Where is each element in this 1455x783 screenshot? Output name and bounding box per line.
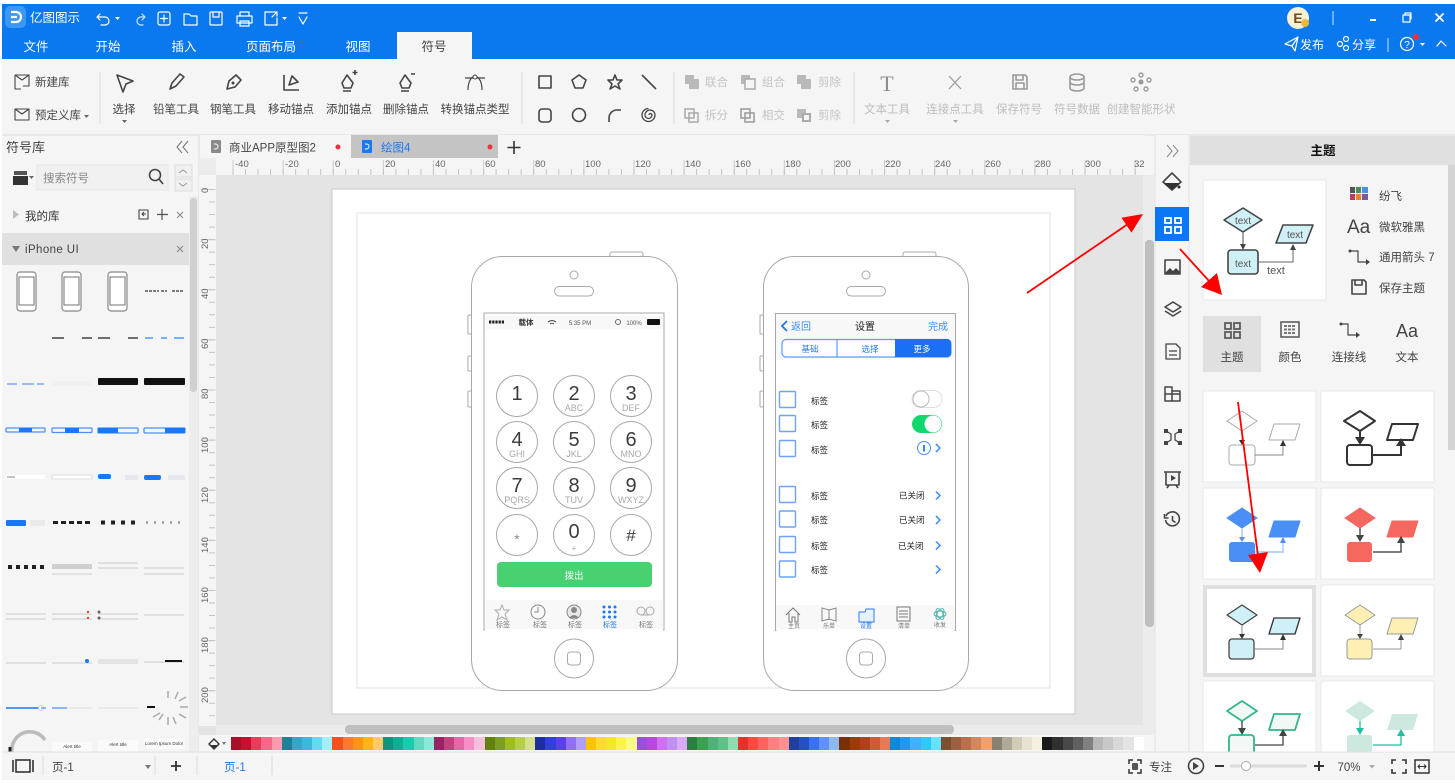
quick access icons — [97, 12, 307, 26]
symbol library panel — [2, 135, 199, 752]
icon: image — [1165, 260, 1180, 274]
horizontal ruler: 80 — [535, 159, 546, 170]
navigation bar: 设置 — [855, 321, 875, 333]
expand icon — [1167, 145, 1178, 157]
theme tabs: 文本 — [1396, 350, 1419, 364]
navigation bar — [776, 314, 955, 337]
horizontal ruler: 160 — [735, 159, 751, 170]
keypad: MNO — [620, 449, 642, 459]
boolean tools disabled — [685, 75, 841, 122]
icon: fill bucket — [1163, 173, 1181, 190]
page view icon — [13, 760, 33, 772]
vertical ruler: 60 — [200, 338, 211, 349]
panel heading: 符号库 — [6, 140, 45, 155]
add page — [171, 761, 181, 771]
horizontal ruler: 200 — [835, 159, 851, 170]
text and data tools disabled: 连接点工具 — [926, 102, 984, 116]
card: mint — [1321, 681, 1434, 772]
keypad: 2 — [568, 383, 580, 405]
library scrollbar — [189, 196, 198, 752]
theme tabs: Aa — [1396, 321, 1419, 341]
status bar: 100% — [626, 321, 642, 327]
search box: 搜索符号 — [43, 171, 89, 185]
settings rows — [780, 390, 942, 577]
horizontal ruler: 140 — [685, 159, 701, 170]
settings rows: 已关闭 — [899, 515, 925, 525]
red arrow: to selected card — [1238, 402, 1268, 573]
settings rows: 已关闭 — [898, 541, 924, 551]
icon: mind map — [1164, 429, 1182, 445]
palette bucket icon — [199, 735, 1145, 752]
menu tabs: 开始 — [95, 40, 121, 54]
text and data tools disabled: 文本工具 — [864, 102, 910, 116]
keypad: 0 — [568, 521, 580, 543]
keypad: WXYZ — [618, 495, 645, 505]
horizontal ruler: 0 — [335, 159, 340, 170]
page selector — [52, 762, 151, 774]
anchor tools: 添加锚点 — [326, 102, 372, 116]
settings tab bar: 乐单 — [823, 622, 835, 630]
horizontal ruler: 240 — [935, 159, 951, 170]
menu tabs: 文件 — [23, 39, 49, 54]
vertical ruler: 180 — [200, 637, 211, 653]
keypad: DEF — [622, 403, 641, 413]
horizontal ruler: -20 — [285, 159, 299, 170]
segmented control: 基础 — [801, 344, 819, 354]
keypad: 5 — [568, 429, 580, 451]
horizontal ruler: 32 — [1134, 159, 1145, 170]
canvas area — [199, 158, 1155, 752]
text and data tools disabled: 符号数据 — [1054, 102, 1100, 116]
app name: 亿图图示 — [30, 10, 80, 25]
symbol thumbnails: Alert title — [63, 744, 81, 749]
dial button — [497, 562, 652, 587]
keypad: 4 — [511, 429, 523, 451]
vertical ruler: 100 — [200, 437, 211, 453]
boolean tools disabled: 拆分 — [705, 108, 728, 122]
keypad: PQRS — [504, 495, 530, 505]
vertical ruler: 120 — [200, 487, 211, 503]
tab: drawing 4: 绘图4 — [381, 140, 411, 154]
vertical ruler: 0 — [200, 188, 211, 193]
horizontal ruler: 20 — [385, 159, 396, 170]
vertical scrollbar — [1143, 175, 1155, 735]
zoom slider — [1215, 761, 1375, 774]
horizontal ruler — [199, 158, 1145, 175]
menu tabs: 视图 — [345, 39, 371, 54]
dial tab bar: 标签 — [603, 620, 617, 629]
theme options list — [1347, 187, 1435, 295]
phone 1: dial pad — [468, 252, 678, 690]
menu tabs: 页面布局 — [246, 40, 296, 54]
horizontal ruler: 120 — [635, 159, 651, 170]
horizontal ruler: 220 — [885, 159, 901, 170]
theme options list: Aa — [1347, 217, 1371, 238]
active page label: 页-1 — [224, 762, 246, 774]
horizontal ruler: -40 — [235, 159, 249, 170]
horizontal ruler: 40 — [435, 159, 446, 170]
icon: presentation — [1164, 472, 1181, 488]
segmented control — [776, 337, 955, 359]
icon: palette — [1350, 187, 1368, 200]
ribbon toolbar — [2, 70, 1455, 135]
text and data tools disabled: 创建智能形状 — [1106, 102, 1176, 116]
keypad: 3 — [625, 383, 637, 405]
vertical ruler — [199, 175, 216, 726]
segmented control: 更多 — [913, 344, 931, 354]
title bar — [2, 4, 1455, 59]
keypad: # — [626, 526, 636, 545]
horizontal ruler: 260 — [985, 159, 1001, 170]
symbol thumbnails: Alert title — [109, 742, 127, 747]
toggle off — [912, 390, 942, 408]
theme tabs: 主题 — [1220, 351, 1244, 364]
keypad: TUV — [565, 495, 583, 505]
right theme panel — [1190, 136, 1455, 772]
theme cards — [1203, 391, 1434, 772]
navigation bar: 返回 — [791, 321, 811, 333]
icon: layers — [1165, 302, 1181, 316]
vertical ruler: 160 — [200, 587, 211, 603]
zoom slider: 70% — [1337, 762, 1361, 774]
my library row: 我的库 — [25, 209, 60, 223]
horizontal ruler: 280 — [1035, 159, 1051, 170]
icon: theme selected — [1155, 207, 1189, 241]
home button — [554, 639, 594, 678]
anchor tools: 钢笔工具 — [210, 102, 256, 116]
search box — [13, 165, 192, 191]
horizontal ruler: 300 — [1085, 159, 1101, 170]
red arrow: to preview — [1180, 249, 1222, 295]
settings rows: 已关闭 — [899, 490, 925, 500]
keypad: 7 — [511, 475, 523, 497]
iPhone UI row: iPhone UI — [25, 244, 79, 256]
dial tab bar — [485, 600, 663, 629]
boolean tools disabled: 相交 — [762, 108, 785, 122]
status bar — [485, 316, 663, 329]
vertical ruler: 140 — [200, 537, 211, 553]
theme options list: 保存主题 — [1379, 281, 1425, 295]
user and window controls: 分享 — [1352, 37, 1376, 52]
library buttons: 预定义库 — [35, 108, 81, 122]
card: green outline — [1203, 681, 1316, 772]
settings tab bar: 设置 — [860, 622, 872, 630]
user and window controls: E — [1293, 10, 1303, 26]
boolean tools disabled: 剪除 — [818, 75, 841, 89]
theme preview: text — [1235, 259, 1251, 270]
menu tabs — [23, 32, 472, 59]
vertical ruler: 80 — [200, 388, 211, 399]
shape tools — [539, 75, 656, 122]
library buttons: 新建库 — [35, 75, 70, 89]
card: red — [1321, 488, 1434, 579]
horizontal ruler: 60 — [485, 159, 496, 170]
vertical ruler: 40 — [200, 288, 211, 299]
theme options list: 微软雅黑 — [1379, 220, 1425, 234]
user and window controls — [1285, 7, 1446, 52]
settings tab bar: 收发 — [934, 621, 946, 629]
boolean tools disabled: 剪除 — [818, 108, 841, 122]
my library row — [13, 209, 183, 223]
keypad: 8 — [568, 475, 580, 497]
symbol thumbnails — [6, 272, 188, 752]
panel scrollbar — [1448, 165, 1455, 450]
settings tab bar — [776, 605, 955, 630]
settings rows: 标签 — [811, 396, 829, 406]
icon: outline — [1166, 344, 1180, 359]
panel heading: 主题 — [1310, 143, 1336, 158]
settings tab bar: 主页 — [788, 622, 800, 630]
card: outline — [1203, 391, 1316, 482]
icon: table — [1165, 387, 1180, 401]
user and window controls: 发布 — [1300, 37, 1324, 52]
card: light blue selected — [1205, 587, 1314, 675]
theme tabs: 连接线 — [1332, 350, 1367, 364]
theme tabs — [1203, 316, 1419, 372]
toggle on — [912, 415, 942, 433]
iPhone UI row — [2, 233, 189, 265]
horizontal ruler: 100 — [585, 159, 601, 170]
text and data tools disabled: T — [880, 71, 894, 96]
keypad: GHI — [509, 449, 525, 459]
phone 2: settings — [760, 252, 968, 690]
keypad — [496, 376, 652, 556]
vertical ruler: 200 — [200, 687, 211, 703]
user and window controls: ? — [1404, 40, 1410, 51]
settings rows: 标签 — [811, 420, 829, 430]
tab: drawing 4 — [351, 135, 498, 158]
menu tabs: 符号 — [421, 39, 447, 54]
keypad: + — [572, 544, 577, 553]
status bar: 载体 — [518, 317, 534, 327]
dial tab bar: 标签 — [533, 620, 547, 629]
anchor tools — [112, 70, 510, 123]
segmented control: 选择 — [861, 344, 879, 354]
info icon — [918, 442, 940, 454]
horizontal ruler: 180 — [785, 159, 801, 170]
add tab button — [508, 141, 520, 154]
text and data tools disabled: 保存符号 — [996, 102, 1042, 116]
keypad: ABC — [565, 403, 584, 413]
anchor tools: 移动锚点 — [268, 102, 314, 116]
theme preview: text — [1287, 230, 1303, 241]
keypad: JKL — [566, 449, 582, 459]
tab: business app: 商业APP原型图2 — [229, 140, 316, 154]
status bar: 5:35 PM — [569, 321, 591, 327]
colour palette — [231, 737, 1144, 750]
fit icons — [1392, 760, 1429, 773]
vertical ruler: 20 — [200, 238, 211, 249]
card: yellow — [1321, 585, 1434, 676]
theme options list: 纷飞 — [1379, 190, 1402, 203]
settings rows: 标签 — [811, 491, 829, 501]
settings rows: 标签 — [811, 445, 829, 455]
dial tab bar: 标签 — [568, 620, 582, 629]
keypad: 6 — [625, 429, 637, 451]
library buttons — [15, 75, 89, 122]
app logo — [5, 6, 26, 28]
dial tab bar: 标签 — [639, 620, 653, 629]
side icon strip — [1155, 135, 1189, 752]
keypad: 9 — [625, 475, 637, 497]
dial tab bar: 标签 — [496, 620, 510, 629]
menu tabs: 插入 — [171, 40, 197, 54]
anchor tools: 选择 — [112, 102, 136, 116]
theme tabs: 颜色 — [1278, 350, 1302, 364]
keypad: * — [514, 531, 520, 547]
home button — [846, 639, 886, 678]
anchor tools: 删除锚点 — [383, 102, 429, 116]
settings tab bar: 清单 — [898, 622, 910, 630]
card: blue — [1203, 488, 1316, 579]
card: black — [1321, 391, 1434, 482]
symbol thumbnails: Lorem Ipsum Dolor — [145, 741, 184, 746]
anchor tools: 转换锚点类型 — [440, 102, 510, 116]
red arrow: to theme icon — [1027, 214, 1143, 293]
page sheet — [332, 189, 1075, 714]
settings rows: 标签 — [811, 565, 829, 575]
anchor tools: 铅笔工具 — [153, 102, 199, 116]
theme preview: text — [1235, 216, 1251, 227]
theme preview — [1203, 180, 1326, 300]
boolean tools disabled: 组合 — [762, 75, 785, 89]
tab: business app — [211, 140, 340, 154]
page selector: 页-1 — [52, 762, 74, 774]
horizontal scrollbar — [216, 725, 1143, 735]
icon: history — [1164, 512, 1179, 526]
theme preview: text — [1267, 265, 1285, 277]
focus button — [1129, 760, 1172, 774]
document tabs — [200, 135, 1145, 158]
settings rows: 标签 — [811, 541, 829, 551]
play button — [1188, 758, 1204, 774]
collapse icon — [177, 141, 188, 153]
text and data tools disabled — [864, 71, 1176, 123]
keypad: 1 — [511, 383, 523, 405]
navigation bar: 完成 — [928, 320, 948, 333]
settings rows: 标签 — [811, 515, 829, 525]
focus button: 专注 — [1149, 760, 1172, 774]
bottom status bar — [2, 752, 1455, 780]
theme options list: 通用箭头 7 — [1379, 250, 1435, 264]
dial button: 拨出 — [564, 570, 584, 582]
boolean tools disabled: 联合 — [705, 75, 728, 89]
